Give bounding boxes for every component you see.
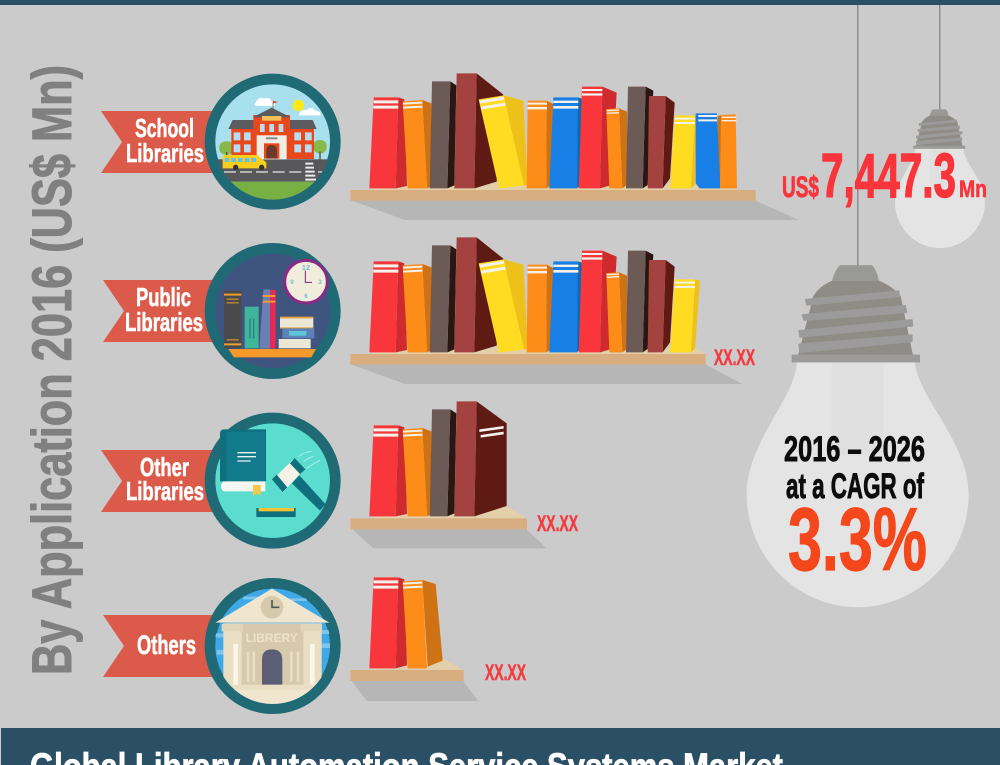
bookshelf: others: [350, 577, 478, 701]
callout: CAGR: 3.3%: [788, 489, 927, 589]
callout: CAGR: [784, 430, 927, 589]
callout: market value: US$: [782, 171, 819, 204]
icon: library building: [210, 583, 335, 709]
ribbon: other libraries: Other: [140, 452, 189, 482]
value: public libraries: XX.XX: [714, 345, 755, 370]
ribbon: school libraries: Libraries: [126, 138, 204, 168]
icon: large light bulb: [747, 5, 969, 607]
ribbon: school libraries: [101, 111, 215, 173]
value: others: XX.XX: [485, 660, 526, 685]
ribbon: others: Others: [137, 630, 196, 660]
icon: bookshelf with clock: 12: [302, 263, 310, 272]
ribbon: public libraries: Libraries: [125, 307, 203, 337]
callout: market value: Mn: [959, 176, 987, 203]
row: other libraries: [101, 418, 335, 543]
icon: school: [210, 79, 335, 204]
ribbon: public libraries: [103, 280, 215, 342]
ribbon: other libraries: [101, 450, 215, 512]
ribbon: public libraries: Public: [136, 282, 191, 312]
row: others: [103, 583, 335, 709]
ribbon: school libraries: School: [135, 113, 194, 143]
bookshelf: school libraries: [350, 73, 799, 220]
value: other libraries: XX.XX: [537, 511, 578, 536]
top bar: [0, 0, 1000, 5]
icon: bookshelf with clock: 9: [290, 280, 294, 286]
callout: CAGR: 2016 – 2026: [784, 430, 925, 469]
icon: library building: LIBRERY: [246, 631, 298, 645]
icon: book and gavel: [210, 418, 335, 543]
bookshelf: other libraries: [350, 401, 547, 548]
icon: small light bulb: [895, 5, 985, 248]
icon: bookshelf with clock: 6: [304, 294, 308, 300]
ribbon: others: [103, 615, 215, 677]
row: school libraries: [101, 79, 335, 204]
row: public libraries: [103, 248, 335, 374]
bookshelf: public libraries: [350, 237, 742, 384]
callout: CAGR: at a CAGR of: [786, 467, 924, 506]
footer bar with title: [1, 728, 1000, 765]
icon: bookshelf with clock: [210, 248, 335, 374]
ribbon: other libraries: Libraries: [126, 476, 204, 506]
icon: bookshelf with clock: 3: [318, 280, 322, 286]
